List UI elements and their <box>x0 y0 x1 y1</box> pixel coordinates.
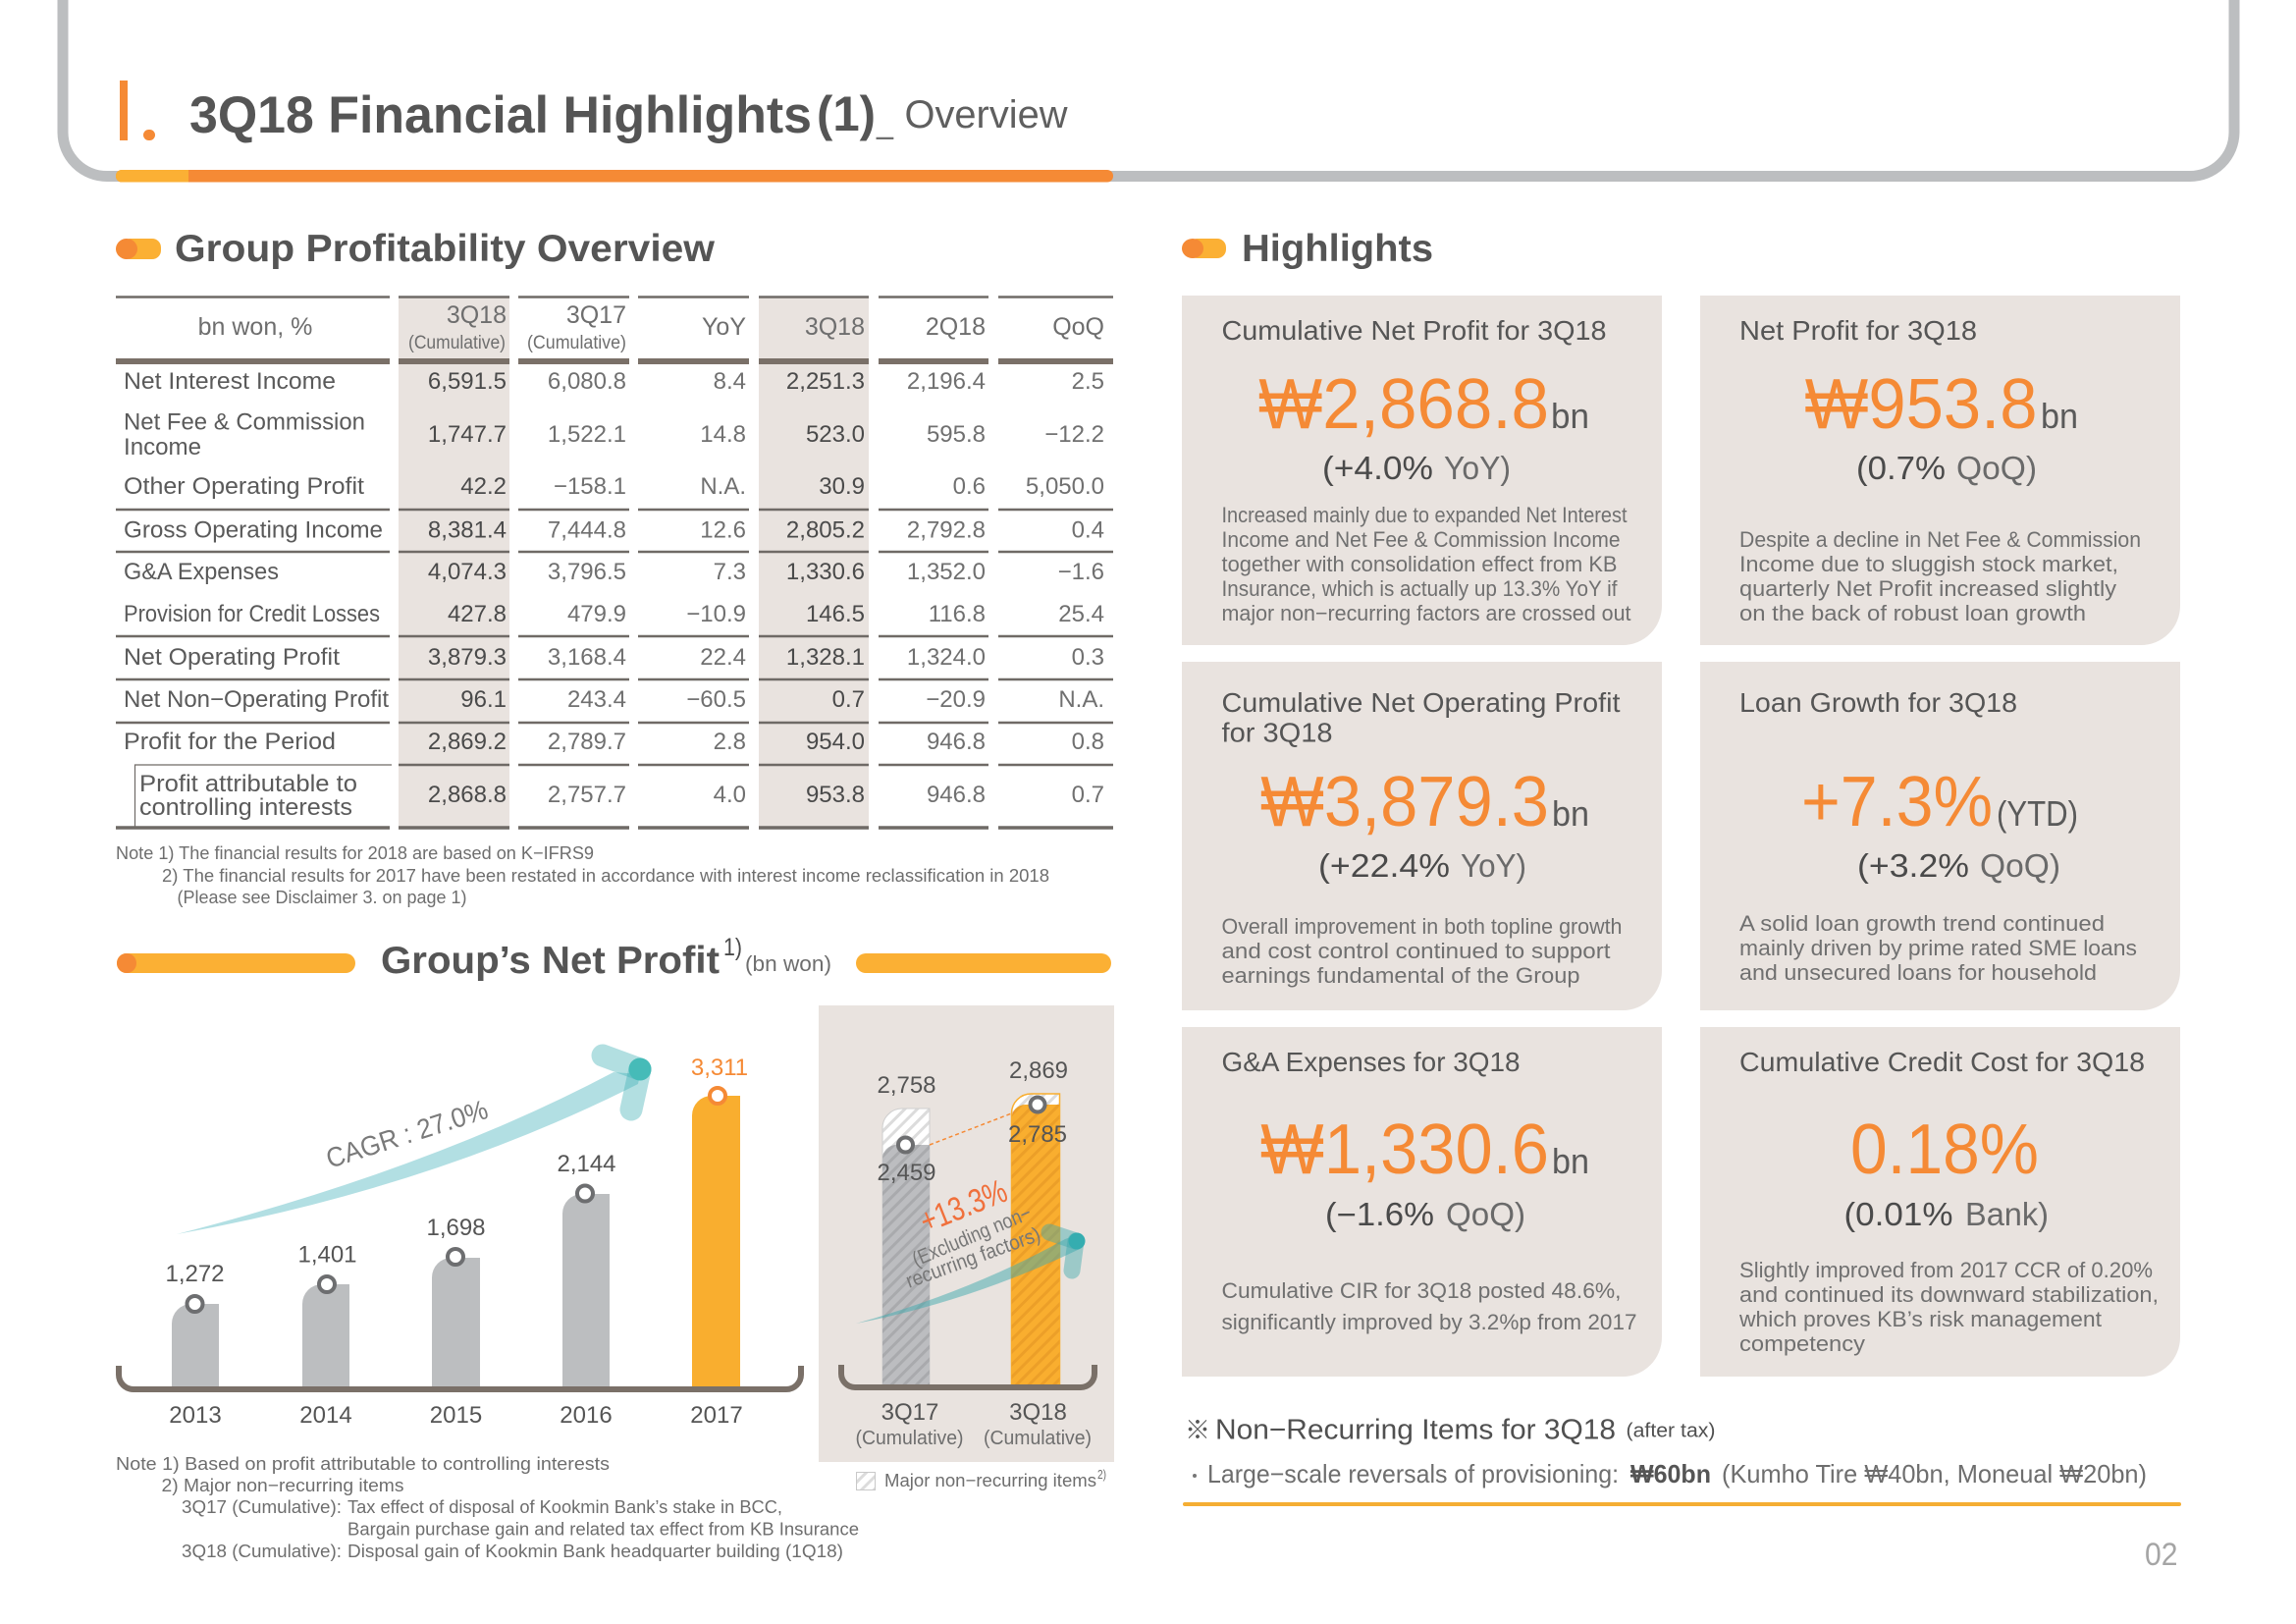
title: _ <box>876 100 894 140</box>
panel: Cumulative Net Profit: (+4.0% <box>1322 450 1433 486</box>
profitability table: 3,168.4 <box>548 644 626 671</box>
panel: Net Profit: on the back of robust loan growth <box>1739 601 2086 625</box>
profitability table: 2,869.2 <box>428 729 507 755</box>
bar chart: net profit 2013-2017 <box>119 1055 801 1429</box>
non-recurring items note: Non−Recurring Items for 3Q18 <box>1215 1414 1616 1445</box>
profitability table: 12.6 <box>700 516 746 544</box>
panel: Cumulative Net Profit: bn <box>1551 396 1589 436</box>
panel: Cumulative Credit Cost: and continued its downward stabilization, <box>1739 1282 2159 1307</box>
profitability table: 2,868.8 <box>428 782 507 808</box>
chart notes: Note 1) Based on profit attributable to controlling interests <box>116 1453 610 1474</box>
panel: Cumulative Credit Cost: competency <box>1739 1331 1865 1356</box>
profitability table: −158.1 <box>554 473 626 500</box>
panel: G&A Expenses: ₩1,330.6 <box>1260 1110 1549 1189</box>
profitability table: Profit attributable to <box>139 771 357 797</box>
profitability table: 30.9 <box>819 473 865 500</box>
profitability table: 0.4 <box>1072 516 1104 544</box>
chart notes: 3Q17 (Cumulative): <box>182 1496 342 1517</box>
profitability table: 25.4 <box>1058 601 1104 627</box>
panel: cumulative comparison chart <box>819 1005 1114 1462</box>
panel: Cumulative Net Profit: Cumulative Net Profit for 3Q18 <box>1221 315 1606 346</box>
profitability table: 427.8 <box>448 601 507 627</box>
non-recurring items note <box>1183 1410 2181 1506</box>
panel: Loan Growth: (+3.2% <box>1857 847 1969 884</box>
profitability table: Net Operating Profit <box>124 644 340 671</box>
profitability table: Other Operating Profit <box>124 473 364 500</box>
profitability table: 3Q17 <box>566 301 626 329</box>
profitability table: Gross Operating Income <box>124 516 383 544</box>
profitability table: −12.2 <box>1044 421 1104 448</box>
chart notes: Disposal gain of Kookmin Bank headquarter building (1Q18) <box>347 1541 843 1561</box>
profitability table: 5,050.0 <box>1026 473 1104 500</box>
profitability table: N.A. <box>700 473 746 500</box>
table notes: 2) The financial results for 2017 have been restated in accordance with interest income reclassification in 2018 <box>162 865 1049 886</box>
panel: G&A Expenses: G&A Expenses for 3Q18 <box>1221 1047 1520 1077</box>
profitability table: 0.7 <box>1072 782 1104 808</box>
title: (1) <box>817 86 876 141</box>
profitability table: 2,805.2 <box>786 516 865 544</box>
profitability table: controlling interests <box>139 794 352 821</box>
profitability table: 116.8 <box>929 601 986 627</box>
panel: cumulative comparison chart: (Cumulative) <box>856 1428 964 1449</box>
profitability table: Net Fee & Commission <box>124 408 365 436</box>
panel: Cumulative Credit Cost: which proves KB’s risk management <box>1738 1307 2102 1331</box>
profitability table: 7,444.8 <box>548 516 626 544</box>
panel: Cumulative Credit Cost: Cumulative Credit Cost for 3Q18 <box>1739 1047 2145 1077</box>
profitability table: 6,080.8 <box>548 368 626 395</box>
heading: Group's Net Profit: (bn won) <box>745 951 831 976</box>
bar chart: net profit 2013-2017: 2017 <box>690 1402 743 1429</box>
bar chart: net profit 2013-2017: 2013 <box>169 1402 222 1429</box>
profitability table: G&A Expenses <box>124 559 279 585</box>
heading: Group Profitability Overview: Group Profitability Overview <box>175 228 716 270</box>
legend: major non-recurring items: Major non−recurring items <box>884 1470 1096 1490</box>
title <box>120 81 1068 144</box>
heading: Group's Net Profit: 1) <box>723 934 742 961</box>
profitability table: bn won, % <box>198 313 312 341</box>
profitability table: 4,074.3 <box>428 559 507 585</box>
profitability table: (Cumulative) <box>527 333 626 353</box>
chart notes: Bargain purchase gain and related tax effect from KB Insurance <box>347 1518 859 1540</box>
profitability table: Provision for Credit Losses <box>124 601 380 627</box>
page number: 02 <box>2145 1537 2177 1572</box>
panel: Cumulative Net Profit: Increased mainly due to expanded Net Interest <box>1221 503 1628 527</box>
panel: cumulative comparison chart: (Cumulative) <box>984 1428 1092 1449</box>
profitability table: 2,196.4 <box>907 368 986 395</box>
table notes: Note 1) The financial results for 2018 are based on K−IFRS9 <box>116 842 594 863</box>
panel: G&A Expenses: (−1.6% <box>1325 1196 1434 1232</box>
panel: Cumulative Net Profit: ₩2,868.8 <box>1258 365 1549 444</box>
chart notes: 2) Major non−recurring items <box>161 1475 404 1495</box>
profitability table: −1.6 <box>1058 559 1104 585</box>
panel: Cumulative Net Profit <box>1182 296 1662 645</box>
heading: Group's Net Profit <box>117 934 1111 982</box>
profitability table: 595.8 <box>927 421 986 448</box>
panel: Cumulative Net Operating Profit: Cumulative Net Operating Profit <box>1221 687 1621 718</box>
chart notes <box>116 1453 859 1561</box>
title: Overview <box>905 93 1068 136</box>
panel: Cumulative Net Operating Profit: (+22.4% <box>1318 847 1450 884</box>
profitability table: 96.1 <box>460 686 507 713</box>
bar chart: net profit 2013-2017: 1,401 <box>297 1241 357 1269</box>
profitability table: −10.9 <box>686 601 746 627</box>
chart notes: 3Q18 (Cumulative): <box>182 1541 342 1561</box>
heading: Highlights: Highlights <box>1242 228 1433 270</box>
profitability table <box>116 297 1113 828</box>
panel: cumulative comparison chart: (Excluding non− <box>909 1202 1035 1272</box>
panel: Cumulative Net Operating Profit: Overall improvement in both topline growth <box>1221 914 1622 939</box>
arrow: CAGR trend: CAGR : 27.0% <box>322 1094 492 1174</box>
panel: G&A Expenses: significantly improved by 3.2%p from 2017 <box>1221 1310 1637 1334</box>
panel: Cumulative Net Profit: together with consolidation effect from KB <box>1221 552 1618 576</box>
profitability table: 1,324.0 <box>907 644 986 671</box>
profitability table: 0.3 <box>1072 644 1104 671</box>
profitability table: 2,757.7 <box>548 782 626 808</box>
panel: G&A Expenses: Cumulative CIR for 3Q18 posted 48.6%, <box>1221 1278 1622 1303</box>
profitability table: 6,591.5 <box>428 368 507 395</box>
profitability table: 1,747.7 <box>428 421 507 448</box>
panel: Loan Growth: (YTD) <box>1997 793 2078 834</box>
profitability table: (Cumulative) <box>408 333 506 353</box>
profitability table: Profit for the Period <box>124 729 336 755</box>
profitability table: 946.8 <box>927 782 986 808</box>
profitability table: 2,792.8 <box>907 516 986 544</box>
profitability table: 2,789.7 <box>548 729 626 755</box>
profitability table: 3Q18 <box>447 301 507 329</box>
profitability table: 2,251.3 <box>786 368 865 395</box>
panel: G&A Expenses <box>1182 1027 1662 1377</box>
panel: Cumulative Net Operating Profit: for 3Q18 <box>1221 717 1333 748</box>
profitability table: 7.3 <box>714 559 746 585</box>
panel: Net Profit: Net Profit for 3Q18 <box>1739 315 1977 346</box>
panel: Net Profit <box>1700 296 2180 645</box>
profitability table: 2.5 <box>1072 368 1104 395</box>
panel: cumulative comparison chart: 2,869 <box>1009 1057 1068 1084</box>
panel: Net Profit: QoQ) <box>1956 450 2037 486</box>
profitability table: 1,328.1 <box>786 644 865 671</box>
profitability table: 8.4 <box>714 368 746 395</box>
profitability table: 2.8 <box>714 729 746 755</box>
profitability table: 3,879.3 <box>428 644 507 671</box>
non-recurring items note: Large−scale reversals of provisioning: <box>1207 1459 1619 1489</box>
profitability table: 0.6 <box>953 473 986 500</box>
panel: Cumulative Credit Cost <box>1700 1027 2180 1377</box>
panel: Net Profit: ₩953.8 <box>1804 365 2038 444</box>
panel: Loan Growth: A solid loan growth trend continued <box>1739 911 2105 936</box>
arrow: growth excluding non-recurring <box>856 1232 1086 1324</box>
bar chart: net profit 2013-2017: 2014 <box>299 1402 352 1429</box>
non-recurring items note: ₩60bn <box>1630 1459 1711 1489</box>
panel: Net Profit: quarterly Net Profit increased slightly <box>1739 576 2116 601</box>
profitability table: 479.9 <box>567 601 626 627</box>
profitability table: 8,381.4 <box>428 516 507 544</box>
profitability table: YoY <box>702 313 746 341</box>
panel: Net Profit: Income due to sluggish stock market, <box>1739 552 2118 576</box>
panel: Net Profit: (0.7% <box>1856 450 1946 486</box>
table notes <box>116 842 1049 907</box>
profitability table: 0.7 <box>832 686 865 713</box>
panel: Cumulative Credit Cost: (0.01% <box>1843 1196 1953 1232</box>
panel: Cumulative Net Operating Profit: earnings fundamental of the Group <box>1221 963 1580 988</box>
profitability table: 146.5 <box>806 601 865 627</box>
panel: Cumulative Credit Cost: 0.18% <box>1850 1110 2039 1189</box>
panel: Loan Growth: mainly driven by prime rated SME loans <box>1739 936 2137 960</box>
panel: cumulative comparison chart: +13.3% <box>915 1172 1012 1240</box>
title: 3Q18 Financial Highlights <box>189 86 812 144</box>
bar chart: net profit 2013-2017: 2015 <box>430 1402 482 1429</box>
panel: Cumulative Net Operating Profit: ₩3,879.3 <box>1260 763 1549 841</box>
profitability table: 0.8 <box>1072 729 1104 755</box>
page header frame <box>63 0 2234 183</box>
profitability table: Income <box>124 434 201 460</box>
panel: Cumulative Net Operating Profit: and cost control continued to support <box>1221 939 1610 963</box>
profitability table: 1,330.6 <box>786 559 865 585</box>
bar chart: net profit 2013-2017: 2,144 <box>557 1151 616 1177</box>
profitability table: 2Q18 <box>926 313 986 341</box>
profitability table: 523.0 <box>806 421 865 448</box>
profitability table: 946.8 <box>927 729 986 755</box>
bar chart: net profit 2013-2017: 2016 <box>560 1402 613 1429</box>
profitability table: 1,522.1 <box>548 421 626 448</box>
profitability table: 954.0 <box>806 729 865 755</box>
panel: cumulative comparison chart: 2,785 <box>1008 1121 1067 1148</box>
panel: G&A Expenses: QoQ) <box>1446 1196 1525 1232</box>
profitability table: 3Q18 <box>805 313 865 341</box>
profitability table: 22.4 <box>700 644 746 671</box>
profitability table: −20.9 <box>926 686 986 713</box>
panel: cumulative comparison chart: recurring factors) <box>903 1223 1043 1293</box>
profitability table: Net Non−Operating Profit <box>124 686 389 713</box>
panel: Loan Growth: and unsecured loans for household <box>1739 960 2097 985</box>
panel: Cumulative Credit Cost: Bank) <box>1965 1196 2049 1232</box>
profitability table: 243.4 <box>567 686 626 713</box>
panel: cumulative comparison chart: 2,459 <box>877 1160 936 1186</box>
panel: cumulative comparison chart: 3Q18 <box>1009 1399 1067 1426</box>
panel: Cumulative Net Profit: Insurance, which is actually up 13.3% YoY if <box>1221 576 1618 601</box>
non-recurring items note: (Kumho Tire ₩40bn, Moneual ₩20bn) <box>1722 1459 2147 1489</box>
panel: Cumulative Net Operating Profit: bn <box>1552 793 1589 834</box>
profitability table: −60.5 <box>686 686 746 713</box>
panel: Loan Growth: +7.3% <box>1801 763 1993 841</box>
panel: Net Profit: bn <box>2041 396 2078 436</box>
panel: Cumulative Net Operating Profit <box>1182 662 1662 1010</box>
bar chart: net profit 2013-2017: 1,272 <box>165 1261 225 1287</box>
panel: Net Profit: Despite a decline in Net Fee & Commission <box>1739 527 2141 552</box>
profitability table: 4.0 <box>714 782 746 808</box>
panel: Cumulative Credit Cost: Slightly improved from 2017 CCR of 0.20% <box>1739 1258 2153 1282</box>
panel: Loan Growth <box>1700 662 2180 1010</box>
non-recurring items note: ※ <box>1185 1410 1210 1447</box>
non-recurring items note: (after tax) <box>1626 1420 1716 1441</box>
panel: Cumulative Net Profit: Income and Net Fee & Commission Income <box>1221 527 1620 552</box>
panel: Cumulative Net Profit: YoY) <box>1444 450 1511 486</box>
heading: Group's Net Profit: Group’s Net Profit <box>381 940 720 982</box>
arrow: CAGR trend <box>177 1056 652 1234</box>
panel: cumulative comparison chart: 2,758 <box>877 1072 936 1099</box>
profitability table: 42.2 <box>460 473 507 500</box>
profitability table: QoQ <box>1052 313 1104 341</box>
profitability table: 953.8 <box>806 782 865 808</box>
profitability table: Net Interest Income <box>124 368 336 395</box>
bar chart: net profit 2013-2017: 1,698 <box>426 1215 486 1241</box>
panel: Cumulative Net Profit: major non−recurring factors are crossed out <box>1221 601 1631 625</box>
chart notes: Tax effect of disposal of Kookmin Bank’s stake in BCC, <box>347 1496 782 1517</box>
table notes: (Please see Disclaimer 3. on page 1) <box>177 887 467 907</box>
profitability table: 1,352.0 <box>907 559 986 585</box>
panel: cumulative comparison chart: 3Q17 <box>881 1399 938 1426</box>
panel: Loan Growth: Loan Growth for 3Q18 <box>1739 687 2017 718</box>
profitability table: N.A. <box>1058 686 1104 713</box>
profitability table: 3,796.5 <box>548 559 626 585</box>
bar chart: net profit 2013-2017: 3,311 <box>691 1055 748 1081</box>
profitability table: 14.8 <box>700 421 746 448</box>
panel: Cumulative Net Operating Profit: YoY) <box>1461 847 1526 884</box>
panel: G&A Expenses: bn <box>1552 1141 1589 1181</box>
panel: Loan Growth: QoQ) <box>1980 847 2060 884</box>
legend: major non-recurring items: 2) <box>1097 1467 1106 1482</box>
